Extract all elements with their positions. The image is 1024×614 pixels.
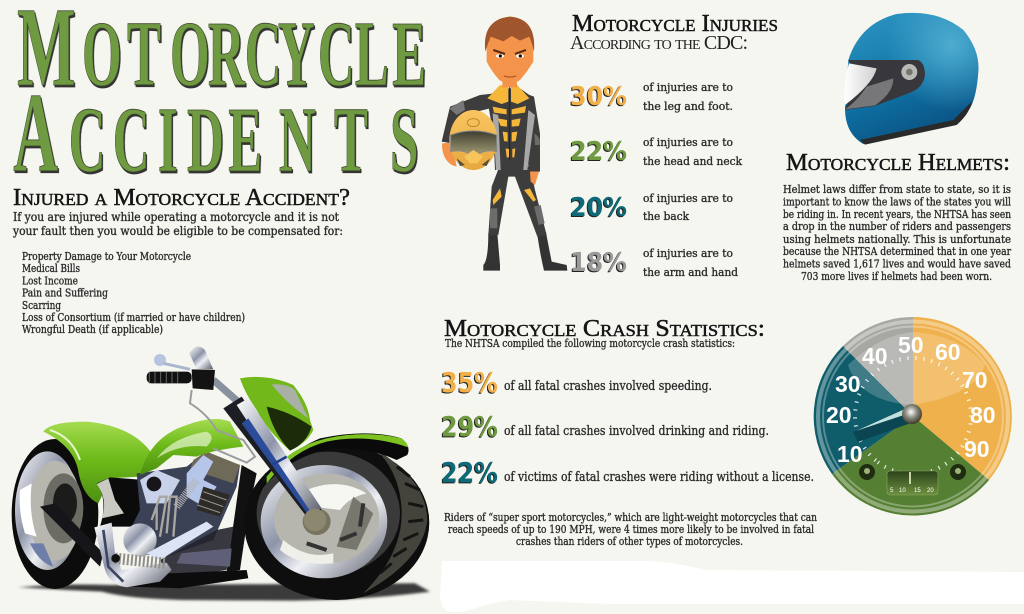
stat: 18 percent <box>570 247 738 279</box>
arms <box>525 93 540 172</box>
dial numbers: 10 <box>837 441 863 467</box>
helmet chin trim <box>860 102 972 145</box>
stat: 30 percent <box>570 81 733 113</box>
helmet held <box>449 110 497 170</box>
heading: crash statistics: Motorcycle Crash Statistics: <box>444 316 765 342</box>
stat: 22 percent: the head and neck <box>643 155 742 168</box>
super sport paragraph: Riders of “super sport motorcycles,” which are light-weight motorcycles that can <box>444 511 817 524</box>
headlight nacelle <box>240 377 313 451</box>
section: motorcycle helmets <box>783 150 1012 283</box>
engine <box>123 452 240 560</box>
dial numbers: 40 <box>862 343 888 369</box>
front wheel <box>244 445 429 600</box>
helmet shell <box>845 13 978 144</box>
left lamp <box>859 464 875 480</box>
super sport paragraph: reach speeds of up to 190 MPH, were 4 times more likely to be involved in fatal <box>448 523 814 536</box>
stat: 29 percent drinking <box>441 410 769 443</box>
speedometer <box>814 317 1012 515</box>
stat: 35 percent speeding: 35% <box>441 366 498 399</box>
stat: 22 percent: of injuries are to <box>643 136 733 149</box>
stat: 20 percent: of injuries are to <box>643 192 733 205</box>
stat: 29 percent drinking: of all fatal crashes involved drinking and riding. <box>504 424 769 439</box>
dial numbers: 80 <box>970 402 996 428</box>
stat: 30 percent: of injuries are to <box>643 81 733 94</box>
front axle <box>304 509 326 531</box>
front fork <box>223 397 322 517</box>
visor pivot <box>901 64 917 80</box>
right lamp <box>950 464 966 480</box>
intro text: your fault then you would be eligible to be compensated for: <box>12 224 343 238</box>
section: motorcycle injuries <box>570 11 778 279</box>
section: crash statistics <box>441 316 817 548</box>
glass highlight <box>848 332 985 405</box>
heading: injuries: Motorcycle Injuries <box>572 11 778 37</box>
stat: 22 percent <box>570 136 742 168</box>
crash intro: The NHTSA compiled the following motorcycle crash statistics: <box>445 337 735 350</box>
dial numbers: 70 <box>962 367 988 393</box>
rear fender <box>43 422 152 503</box>
stat: 22 percent no license: of victims of fatal crashes were riding without a license. <box>504 470 814 485</box>
odometer: 20 <box>927 488 934 494</box>
compensation list: Property Damage to Your Motorcycle <box>22 250 191 263</box>
stat: 22 percent: 22% <box>570 137 627 167</box>
dial numbers: 30 <box>835 371 861 397</box>
compensation list: Loss of Consortium (if married or have children) <box>22 311 245 324</box>
handlebar <box>147 347 240 403</box>
compensation list: Scarring <box>22 299 61 312</box>
helmet opening <box>845 60 925 110</box>
stat: 18 percent: the arm and hand <box>643 266 738 279</box>
frame <box>227 465 257 572</box>
needle hub <box>902 404 922 424</box>
stat: 18 percent: 18% <box>570 248 627 278</box>
dial: gray sector <box>843 317 913 416</box>
dial numbers <box>826 332 996 467</box>
tick marks <box>831 334 995 498</box>
odometer <box>887 471 938 495</box>
compensation list: Wrongful Death (if applicable) <box>22 323 163 336</box>
stat: 20 percent <box>570 192 733 223</box>
stat: 30 percent: 30% <box>570 82 627 112</box>
suit yellow panels <box>487 85 529 157</box>
odometer: 10 <box>899 488 906 494</box>
helmet paragraph <box>783 183 1012 283</box>
dial: yellow sector <box>913 317 1012 480</box>
section: injured in an accident <box>12 185 350 336</box>
stat: 20 percent: the back <box>643 210 689 223</box>
brake cable <box>190 390 255 463</box>
dial numbers: 90 <box>964 436 990 462</box>
super sport paragraph: crashes than riders of other types of motorcycles. <box>516 535 743 548</box>
title <box>13 0 426 196</box>
visor <box>845 63 877 105</box>
dial: teal sector <box>814 346 913 474</box>
dial: green sector <box>832 416 989 515</box>
helmet inner lining <box>845 78 893 109</box>
dial numbers: 20 <box>826 402 852 428</box>
illustration: rider <box>442 17 567 271</box>
dial rim <box>818 322 1008 512</box>
white patch at bottom <box>440 561 1024 612</box>
neck <box>502 73 517 87</box>
rear wheel <box>12 439 98 589</box>
compensation list: Lost Income <box>22 274 78 288</box>
title line two: ACCIDENTS <box>13 71 418 196</box>
front fender <box>253 433 409 500</box>
stat: 20 percent: 20% <box>570 193 627 223</box>
stat: 22 percent no license <box>441 456 814 489</box>
swing arm <box>40 503 103 567</box>
needle <box>853 407 919 442</box>
helmet paragraph: using helmets nationally. This is unfortunate <box>783 233 1011 246</box>
legs <box>488 167 547 237</box>
illustration: blue helmet <box>845 13 978 145</box>
fuel tank <box>140 419 243 475</box>
torso <box>487 88 533 170</box>
head <box>485 17 534 84</box>
dial numbers: 50 <box>898 332 924 358</box>
compensation list <box>22 250 245 336</box>
compensation list: Pain and Suffering <box>22 286 108 300</box>
odometer: 5 <box>890 488 894 494</box>
suit zip <box>508 85 511 160</box>
stat: 18 percent: of injuries are to <box>643 247 733 260</box>
rear spring <box>115 558 165 563</box>
heading: helmets: Motorcycle Helmets: <box>786 150 1010 176</box>
odometer: 15 <box>914 488 921 494</box>
boots <box>483 233 567 271</box>
stat: 29 percent drinking: 29% <box>441 410 498 443</box>
intro text <box>12 210 343 238</box>
super sport paragraph <box>444 511 817 548</box>
intro text: If you are injured while operating a motorcycle and it is not <box>13 210 339 224</box>
stat: 35 percent speeding: of all fatal crashes involved speeding. <box>504 379 712 394</box>
heading: injured: Injured a Motorcycle Accident? <box>13 185 350 211</box>
stat: 30 percent: the leg and foot. <box>643 100 733 113</box>
exhaust pipe <box>94 523 172 587</box>
ground shadow <box>18 583 430 601</box>
stat: 22 percent no license: 22% <box>441 456 498 489</box>
illustration: motorcycle <box>12 347 430 601</box>
compensation list: Medical Bills <box>22 262 80 275</box>
dial numbers: 60 <box>935 339 961 365</box>
seat shadow and bracket <box>97 477 143 527</box>
subheading: according to the CDC: According to the CDC: <box>570 32 748 54</box>
stat: 35 percent speeding <box>441 366 712 399</box>
